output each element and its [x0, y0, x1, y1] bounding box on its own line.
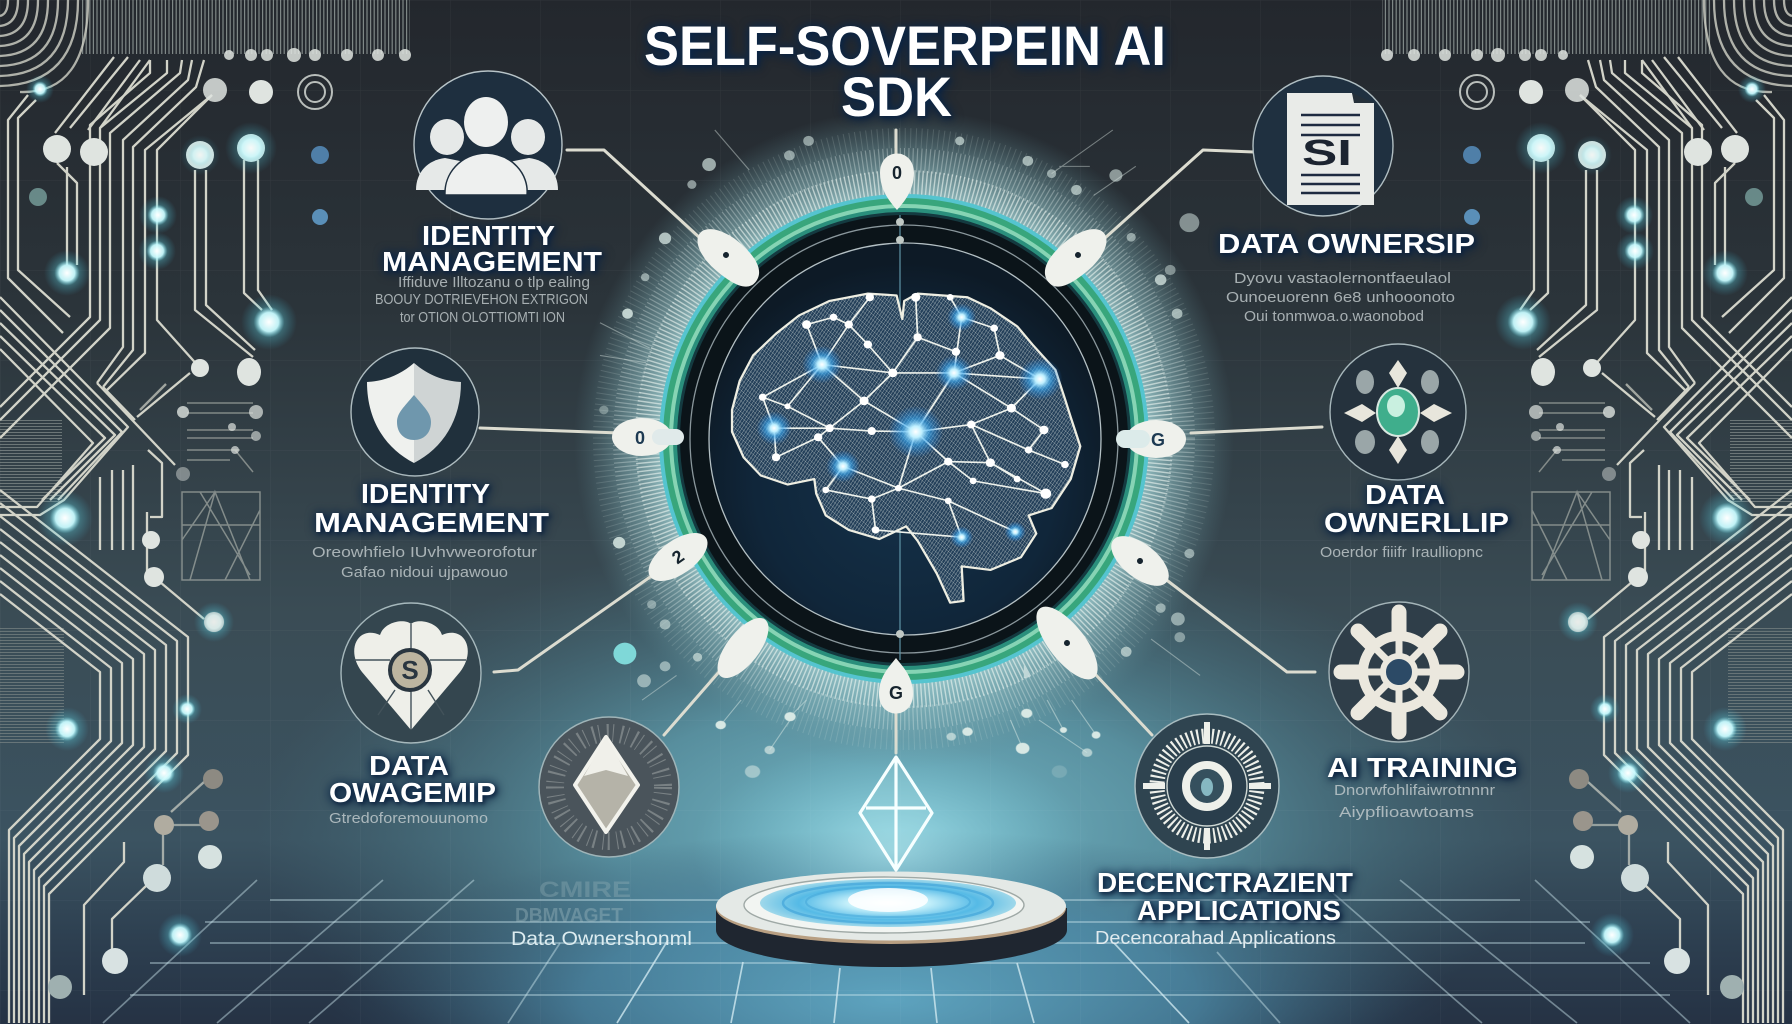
- pin: top left: [688, 219, 768, 295]
- circuit traces: left side: [0, 0, 411, 1023]
- pin: top: 0: [892, 163, 902, 183]
- icon: crystal coin: [539, 717, 679, 857]
- pin: top: [880, 154, 914, 210]
- title: SDK: [841, 65, 952, 128]
- label: identity management 1: [375, 220, 602, 326]
- label: decentralized applications: Decencorahad Applications: [1095, 928, 1336, 948]
- central disc: [709, 243, 1101, 635]
- central ring: [659, 194, 1149, 684]
- label: data ownership 2: [1320, 479, 1509, 561]
- icon: heart emblem: [341, 603, 481, 743]
- dots below ring: [716, 700, 1100, 778]
- label: data ownership 1: DATA OWNERSIP: [1218, 228, 1475, 259]
- label: data ownership 1: Ounoeuorenn 6e8 unhooonoto: [1226, 289, 1455, 306]
- circuit traces: right side: [1381, 0, 1792, 1023]
- label: data ownership faint: [511, 877, 692, 950]
- title: [644, 14, 1166, 128]
- pin: right: G: [1151, 430, 1165, 450]
- icon: document: SI: [1302, 132, 1352, 173]
- nodes: [43, 135, 71, 163]
- icon: heart emblem: S: [401, 655, 419, 685]
- ring pins: [612, 154, 1186, 714]
- label: data ownership 2: OWNERLLIP: [1324, 507, 1509, 538]
- label: identity management 2: Gafao nidoui ujpawouo: [341, 564, 508, 581]
- label: identity management 2: Oreowhfielo IUvhvweorofotur: [312, 544, 537, 561]
- pin: lower right: [1103, 527, 1177, 595]
- label: data ownership 1: Oui tonmwoa.o.waonobod: [1244, 308, 1424, 325]
- platform: [716, 872, 1067, 967]
- label: identity management 2: [312, 478, 549, 581]
- dots row: [224, 48, 411, 62]
- label: data ownership 1: Dyovu vastaolernontfaeulaol: [1234, 270, 1451, 287]
- icon: gear: [1329, 602, 1469, 742]
- label: data ownership 3: [329, 750, 496, 827]
- label: identity management 1: MANAGEMENT: [382, 246, 602, 277]
- pin: bottom: [879, 658, 913, 714]
- scattered dots around ring: [599, 130, 1200, 700]
- label: ai training: Dnorwfohlifaiwrotnnnr: [1334, 782, 1495, 799]
- label: data ownership 3: DATA: [369, 750, 449, 781]
- label: identity management 1: BOOUY DOTRIEVEHON EXTRIGON: [375, 291, 588, 308]
- label: decentralized applications: DECENCTRAZIENT: [1097, 867, 1353, 898]
- icon: people: [414, 71, 562, 219]
- label: data ownership 3: OWAGEMIP: [329, 777, 496, 808]
- label: decentralized applications: APPLICATIONS: [1137, 895, 1341, 926]
- label: data ownership faint: Data Ownershonml: [511, 929, 692, 950]
- label: data ownership 1: [1218, 228, 1475, 325]
- icon: document: [1253, 76, 1393, 216]
- label: identity management 1: IDENTITY: [422, 220, 555, 251]
- label: ai training: [1327, 752, 1518, 821]
- pin: left: [612, 418, 684, 456]
- icon: target: [1135, 714, 1279, 858]
- pin: lower left: 2: [668, 546, 688, 568]
- brain network: [730, 290, 1082, 606]
- pin: left: 0: [635, 428, 645, 448]
- central halo and radial rays: [574, 109, 1234, 769]
- pin: top right: [1036, 219, 1116, 295]
- label: identity management 2: MANAGEMENT: [314, 507, 549, 538]
- pin: bottom left: [708, 610, 778, 686]
- label: ai training: Aiypflioawtoams: [1339, 804, 1474, 821]
- title: SELF-SOVERPEIN AI: [644, 14, 1166, 77]
- label: data ownership 3: Gtredoforemouunomo: [329, 810, 488, 827]
- label: ai training: AI TRAINING: [1327, 752, 1518, 783]
- label: identity management 1: tor OTION OLOTTIOMTI ION: [400, 309, 565, 326]
- pin: bottom right: [1026, 597, 1108, 689]
- pin: bottom: G: [889, 683, 903, 703]
- platform glow: [693, 740, 1093, 960]
- icon: shield: [351, 348, 479, 476]
- label: identity management 2: IDENTITY: [361, 478, 490, 509]
- pin: right: [1116, 420, 1186, 458]
- label: data ownership faint: DBMVAGET: [515, 905, 623, 927]
- label: data ownership 2: Ooerdor fiiifr Iraulliopnc: [1320, 544, 1484, 561]
- small diagram: [182, 403, 260, 580]
- diamond hologram: [860, 757, 932, 870]
- label: data ownership 2: DATA: [1365, 479, 1445, 510]
- icon: network orb: [1330, 344, 1466, 480]
- label: decentralized applications: [1095, 867, 1353, 948]
- perspective floor grid: [103, 880, 1690, 1023]
- label: identity management 1: Iffiduve Illtozanu o tlp ealing: [398, 274, 590, 291]
- connector lines: [480, 130, 1322, 753]
- pin: lower left: [640, 524, 716, 590]
- label: data ownership faint: CMIRE: [539, 877, 631, 902]
